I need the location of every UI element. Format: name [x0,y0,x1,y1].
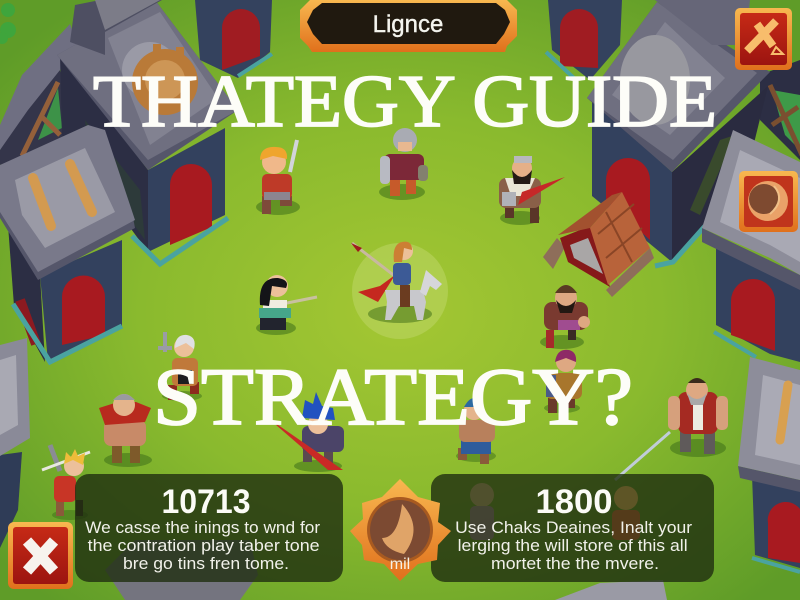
building: bottom centre left roof [105,540,258,600]
clover bush [0,3,16,44]
building: right lower [738,357,800,572]
right description: lerging the will store of this all [458,536,688,555]
character: blonde swordsman [42,445,90,520]
left description: bre go tins fren tome. [123,554,289,573]
tower [70,0,162,55]
building: right middle [702,130,800,362]
icon: round coin [748,181,788,221]
main title: THATEGY GUIDE [93,61,717,143]
right number: 1800 [536,483,612,521]
building: upper right large [587,0,770,266]
right description: mortet the the mvere. [491,554,659,573]
character: blue-haired fighter with red blade [268,392,344,472]
left number: 10713 [162,483,250,521]
character: striped-bandana fighter [456,398,496,464]
top banner [300,0,517,52]
back left connecting wall with window [0,24,78,165]
building: left with tools [0,125,135,362]
tool emblem [780,385,788,440]
panel: right stat [431,474,714,582]
building: upper left large [57,0,238,264]
character: purple-hat rogue [544,350,582,413]
character: dark-haired woman with spear [256,275,317,335]
character: bearded warrior with red blade [499,156,565,225]
left description: the contration play taber tone [88,536,320,555]
building: left lower edge [0,338,30,548]
medallion badge [350,479,451,581]
close button [8,522,73,589]
character: red-caped brute [99,394,152,467]
hut brick bases [543,238,565,269]
panel: left stat [75,474,343,582]
tower [655,0,750,45]
far right window wall [760,60,800,160]
icon: crossed hammers [747,21,783,54]
secondary title: STRATEGY? [153,351,633,442]
character: armoured knight [379,128,428,200]
character: sword fighter [256,140,300,215]
character: big red-vested warrior [615,378,728,480]
gear emblem [132,44,198,115]
button: crossed tools [735,8,792,70]
icon: white cross [27,541,54,571]
medallion label: mil [390,556,410,573]
building: bottom centre right roof [555,580,667,600]
faded figure behind panel [470,483,640,540]
hut with brown roof [543,192,654,297]
banner label: Lignce [373,11,443,38]
building: top left back [195,0,272,78]
right description: Use Chaks Deaines, Inalt your [455,518,692,537]
building: top centre right back [546,0,622,80]
character: bearded brawler [540,285,590,349]
character: white-haired fighter [158,332,202,401]
character: hero on grey horse [351,242,442,323]
tool emblems [33,164,92,226]
button: round emblem [739,171,798,232]
left description: We casse the inings to wnd for [85,518,320,537]
rider halo [352,243,448,339]
